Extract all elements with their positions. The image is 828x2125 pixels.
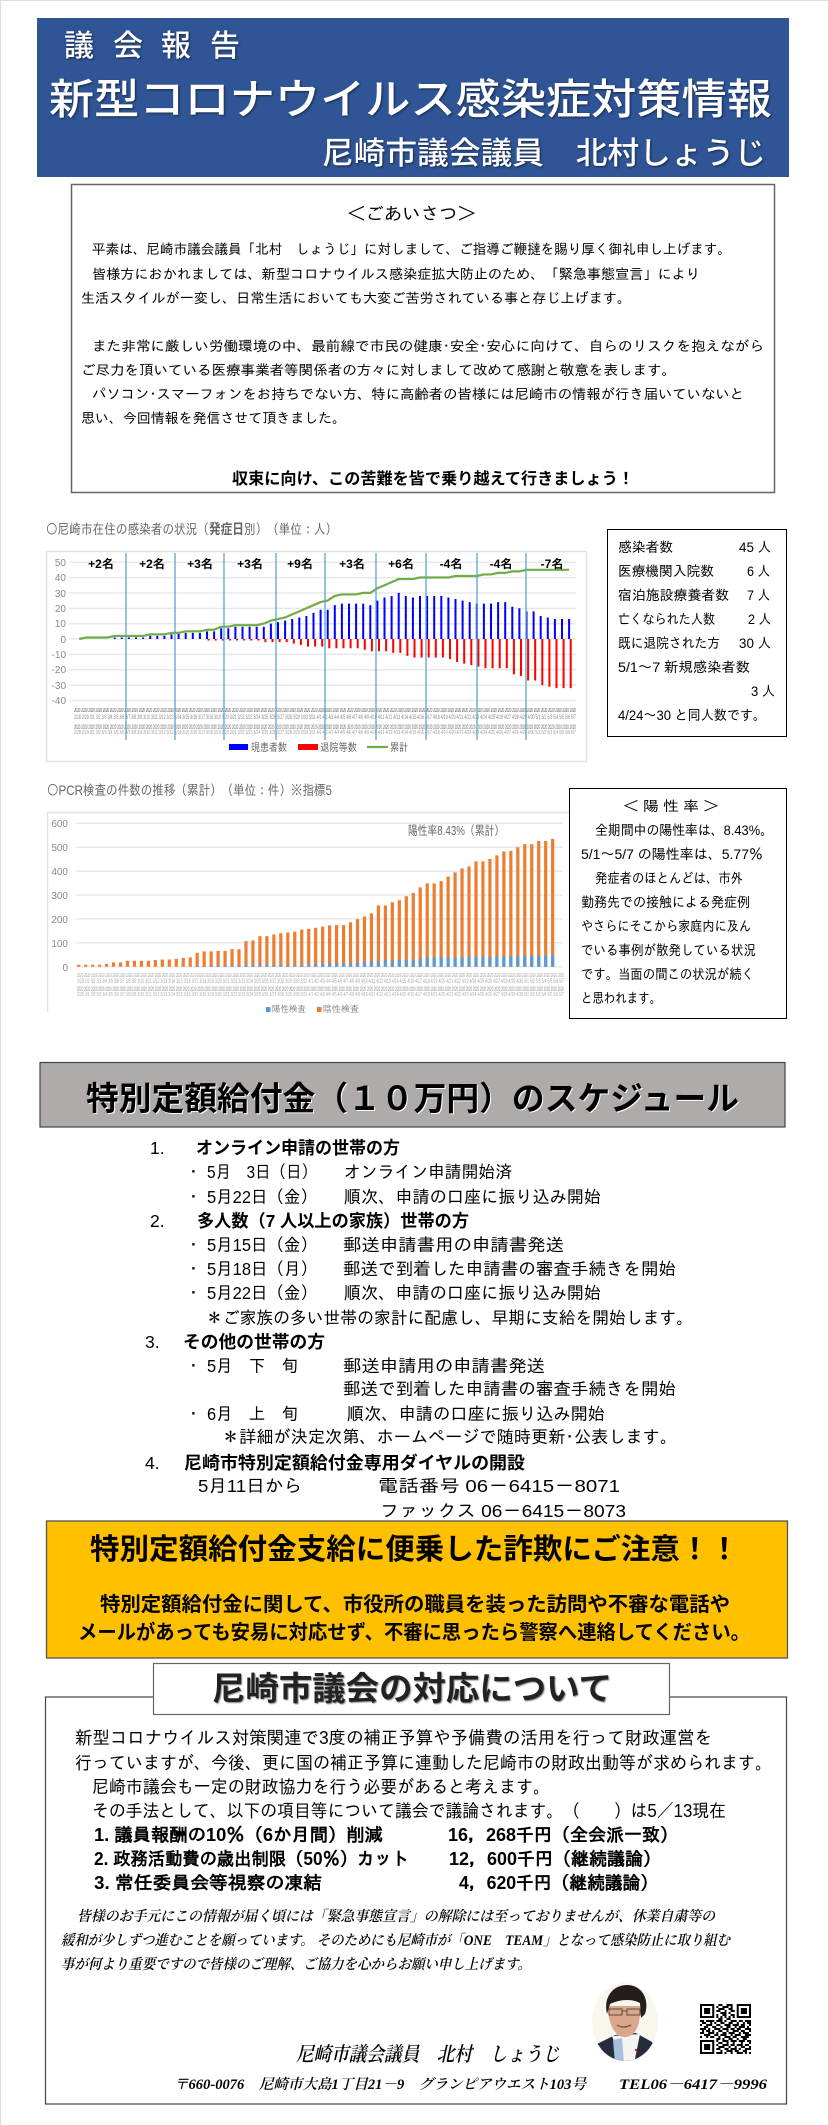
- budget items: 12，600千円（継続議論）: [449, 1849, 661, 1869]
- x axis date labels: 2/28 2/29 3/1 3/2 3/3 3/4 3/5 3/6 3/7 3/8 3/9 3/10 3/11 3/12 3/13 3/14 3/15 3/16 3/17 3/18 3/19 3/20 3/21 3/22 3/23 3/24 3/25 3/26 3/27 3/28 3/29 3/30 3/31 4/1 4/2 4/3 4/4 4/5 4/6 4/7 4/8 4/9 4/10 4/11 4/12 4/13 4/14 4/15 4/16 4/17 4/18 4/19 4/20 4/21 4/22 4/23 4/24 4/25 4/26 4/27 4/28 4/29 4/30 5/1 5/2 5/3 5/4 5/5 5/6 5/7: [74, 730, 576, 736]
- item 1: online applications: オンライン申請開始済: [344, 1162, 512, 1182]
- item 4: dedicated phone line: 尼崎市特別定額給付金専用ダイヤルの開設: [184, 1453, 526, 1473]
- x axis date labels: 2/29 3/1 3/2 3/3 3/4 3/5 3/6 3/7 3/8 3/9 3/10 3/11 3/12 3/13 3/14 3/15 3/16 3/17 3/18 3/19 3/20 3/21 3/22 3/23 3/24 3/25 3/26 3/27 3/28 3/29 3/30 3/31 4/1 4/2 4/3 4/4 4/5 4/6 4/7 4/8 4/9 4/10 4/11 4/12 4/13 4/14 4/15 4/16 4/17 4/18 4/19 4/20 4/21 4/22 4/23 4/24 4/25 4/26 4/27 4/28 4/29 4/30 5/1 5/2 5/3 5/4 5/5 5/6 5/7: [77, 992, 564, 998]
- green line: cumulative: [79, 570, 569, 639]
- y axis labels: -30: [52, 681, 66, 692]
- y axis labels: 10: [55, 619, 66, 630]
- item 2: large households: 郵送申請書用の申請書発送: [343, 1235, 565, 1255]
- item 4: dedicated phone line: 4.: [145, 1453, 160, 1473]
- y axis labels: 600: [51, 819, 68, 830]
- item 3: other households: 6月 上 旬: [207, 1404, 298, 1424]
- budget items: 3. 常任委員会等視察の凍結: [94, 1873, 322, 1893]
- weekly change labels: +6名: [388, 557, 414, 571]
- item 3: other households: ＊詳細が決定次第、ホームページで随時更新･公表します。: [222, 1427, 677, 1447]
- panel: infection summary: 既に退院された方: [618, 635, 720, 651]
- item 3: other households: [145, 1332, 677, 1447]
- item 2: large households: [150, 1211, 693, 1328]
- contact address: 〒660-0076 尼崎市大島1丁目21－9 グランピアウエスト103号: [174, 2076, 588, 2093]
- panel: infection summary: 6 人: [747, 563, 770, 579]
- budget items: 4，620千円（継続議論）: [459, 1873, 658, 1893]
- warning heading: 特別定額給付金支給に便乗した詐欺にご注意！！: [90, 1532, 739, 1566]
- blue bars: current patients: [115, 593, 569, 639]
- item 2: large households: 順次、申請の口座に振り込み開始: [344, 1283, 601, 1303]
- legend: 陽性検査: [272, 1004, 306, 1014]
- greeting body text: また非常に厳しい労働環境の中、最前線で市民の健康･安全･安心に向けて、自らのリスクを抱えながら: [92, 338, 764, 354]
- positivity body text: と思われます。: [581, 990, 661, 1006]
- greeting body text: [81, 241, 764, 426]
- x axis date labels: [74, 708, 576, 736]
- item 2: large households: ･: [189, 1283, 198, 1303]
- budget items: 2. 政務活動費の歳出制限（50％）カット: [94, 1849, 409, 1869]
- weekly change labels: +9名: [287, 557, 313, 571]
- legend: [266, 1004, 359, 1014]
- panel heading: 尼崎市議会の対応について: [212, 1670, 612, 1707]
- body text: その手法として、以下の項目等について議会で議論されます。（ ）は5／13現在: [92, 1801, 726, 1821]
- body text: 尼崎市議会も一定の財政協力を行う必要があると考えます。: [92, 1777, 550, 1797]
- author line: 尼崎市議会議員 北村しょうじ: [322, 128, 766, 173]
- panel: infection summary: 宿泊施設療養者数: [618, 587, 729, 603]
- item 1: online applications: ･: [189, 1187, 198, 1207]
- panel: infection summary: 5/1～7 新規感染者数: [618, 659, 750, 675]
- item 3: other households: 郵送申請用の申請書発送: [343, 1356, 546, 1376]
- panel: infection summary: 45 人: [739, 539, 771, 555]
- legend: 陰性検査: [323, 1004, 359, 1014]
- item 4: dedicated phone line: 電話番号 06－6415－8071: [378, 1476, 620, 1496]
- handwritten message: 皆様のお手元にこの情報が届く頃には「緊急事態宣言」の解除には至っておりませんが、休業自粛等の: [77, 1908, 716, 1925]
- item 2: large households: 5月18日（月）: [207, 1259, 317, 1279]
- greeting body text: パソコン･スマーフォンをお持ちでない方、特に高齢者の皆様には尼崎市の情報が行き届いていないと: [92, 386, 744, 402]
- chart: cumulative PCR tests: [48, 812, 569, 1014]
- schedule list: [145, 1138, 693, 1521]
- item 1: online applications: オンライン申請の世帯の方: [196, 1138, 400, 1158]
- blue bars: positive tests: [197, 955, 553, 967]
- positivity body text: 5/1～5/7 の陽性率は、5.77％: [581, 846, 763, 862]
- y axis labels: -40: [52, 696, 66, 707]
- x axis date labels: [77, 973, 564, 998]
- budget items: [94, 1825, 678, 1893]
- panel: infection summary: 感染者数: [618, 539, 673, 555]
- item 3: other households: ･: [189, 1356, 198, 1376]
- panel: infection summary: 30 人: [739, 635, 771, 651]
- positivity body text: 勤務先での接触による発症例: [581, 894, 750, 910]
- greeting body text: 思い、今回情報を発信させて頂きました。: [81, 410, 346, 426]
- signature: 尼崎市議会議員 北村 しょうじ: [296, 2043, 560, 2066]
- weekly change labels: +3名: [187, 557, 213, 571]
- red bars: discharged: [209, 639, 571, 688]
- weekly change labels: -4名: [440, 557, 462, 571]
- handwritten message: [61, 1908, 731, 1973]
- schedule heading banner: 特別定額給付金（１０万円）のスケジュール: [86, 1080, 739, 1117]
- panel heading: [154, 1664, 670, 1714]
- positivity body text: です。当面の間この状況が続く: [581, 966, 754, 982]
- y axis labels: 40: [55, 573, 66, 584]
- weekly change labels: +3名: [339, 557, 365, 571]
- item 3: other households: 郵送で到着した申請書の審査手続きを開始: [343, 1379, 676, 1399]
- panel: greeting: [72, 184, 774, 492]
- item 4: dedicated phone line: [145, 1453, 626, 1521]
- item 2: large households: 5月22日（金）: [207, 1283, 317, 1303]
- chart: infected persons by onset date: [46, 552, 586, 762]
- chart title: PCR tests: ○PCR検査の件数の推移（累計）（単位：件）※指標5: [47, 782, 332, 798]
- handwritten message: 事が何より重要ですので皆様のご理解、ご協力を心からお願い申し上げます。: [61, 1956, 531, 1973]
- y axis labels: [52, 558, 66, 707]
- warning text: 特別定額給付金に関して、市役所の職員を装った訪問や不審な電話や: [100, 1593, 730, 1616]
- item 4: dedicated phone line: 5月11日から: [198, 1476, 302, 1496]
- panel: infection summary: 4/24～30 と同人数です。: [618, 707, 766, 723]
- panel: infection summary: 2 人: [748, 611, 771, 627]
- header banner: [37, 18, 789, 177]
- legend: 現患者数: [251, 742, 287, 754]
- panel: fraud warning: [46, 1521, 788, 1658]
- item 3: other households: 3.: [145, 1332, 160, 1352]
- legend: [229, 741, 408, 754]
- item 2: large households: 2.: [150, 1211, 165, 1231]
- panel: city council response: [46, 1664, 786, 2104]
- body text: 行っていますが、今後、更に国の補正予算に連動した尼崎市の財政出動等が求められます。: [75, 1753, 772, 1773]
- legend: 退院等数: [320, 741, 357, 754]
- budget items: 1. 議員報酬の10％（6か月間）削減: [94, 1825, 383, 1845]
- item 2: large households: 郵送で到着した申請書の審査手続きを開始: [343, 1259, 676, 1279]
- body text: 新型コロナウイルス対策関連で3度の補正予算や予備費の活用を行って財政運営を: [75, 1728, 712, 1748]
- y axis labels: 300: [51, 891, 68, 902]
- kicker: council report: 議会報告: [64, 21, 240, 65]
- orange bars: negative tests: [79, 839, 553, 967]
- y axis labels: 400: [51, 867, 68, 878]
- icon: portrait photo: [592, 1983, 658, 2061]
- item 3: other households: 順次、申請の口座に振り込み開始: [347, 1404, 605, 1424]
- y axis labels: 30: [55, 589, 66, 600]
- item 3: other households: その他の世帯の方: [183, 1332, 325, 1352]
- item 2: large households: ･: [189, 1259, 198, 1279]
- weekly change labels: -4名: [490, 557, 512, 571]
- chart title: infections by onset date: ○尼崎市在住の感染者の状況（発症日別）（単位：人）: [46, 521, 337, 537]
- item 1: online applications: 順次、申請の口座に振り込み開始: [344, 1187, 601, 1207]
- y axis labels: 0: [62, 963, 68, 974]
- panel: infection summary: [608, 530, 786, 736]
- budget items: 16，268千円（全会派一致）: [448, 1825, 678, 1845]
- greeting body text: 生活スタイルが一変し、日常生活においても大変ご苦労されている事と存じ上げます。: [81, 290, 631, 306]
- y axis labels: -10: [52, 650, 66, 661]
- item 1: online applications: [150, 1138, 601, 1207]
- item 1: online applications: 1.: [150, 1138, 165, 1158]
- y axis labels: 20: [55, 604, 66, 615]
- positivity body text: 全期間中の陽性率は、8.43%。: [595, 822, 773, 838]
- item 2: large households: 5月15日（金）: [207, 1235, 317, 1255]
- weekly change labels: -7名: [541, 557, 563, 571]
- item 1: online applications: 5月22日（金）: [207, 1187, 317, 1207]
- weekly period dividers: [126, 553, 526, 740]
- schedule heading banner: [40, 1062, 785, 1127]
- main title: 新型コロナウイルス感染症対策情報: [49, 66, 772, 127]
- positivity body text: [581, 822, 773, 1006]
- item 3: other households: ･: [189, 1404, 198, 1424]
- item 2: large households: 多人数（7 人以上の家族）世帯の方: [197, 1211, 469, 1231]
- positivity body text: でいる事例が散発している状況: [581, 942, 756, 958]
- positivity heading: ＜ 陽 性 率 ＞: [623, 798, 719, 814]
- weekly change labels: [88, 557, 563, 571]
- icon: QR code: [700, 2005, 751, 2053]
- weekly change labels: +3名: [237, 557, 263, 571]
- y axis labels: 50: [55, 558, 66, 569]
- y axis labels: -20: [52, 665, 66, 676]
- panel: infection summary: 7 人: [747, 587, 770, 603]
- body text: [75, 1728, 772, 1821]
- panel: fraud warning: メールがあっても安易に対応せず、不審に思ったら警察へ連絡してください。: [78, 1620, 750, 1644]
- item 2: large households: ＊ご家族の多い世帯の家計に配慮し、早期に支給を開始します。: [206, 1308, 693, 1328]
- item 1: online applications: ･: [189, 1162, 198, 1182]
- y axis labels: [51, 819, 68, 974]
- panel: infection summary: 医療機関入院数: [618, 563, 714, 579]
- handwritten message: 緩和が少しずつ進むことを願っています。 そのためにも尼崎市が「ONE TEAM」となって感染防止に取り組む: [61, 1932, 731, 1949]
- greeting heading: ＜ごあいさつ＞: [347, 204, 476, 224]
- greeting body text: 皆様方におかれましては、新型コロナウイルス感染症拡大防止のため、「緊急事態宣言」により: [92, 266, 700, 282]
- contact phone: TEL06－6417－9996: [619, 2077, 768, 2093]
- item 2: large households: ･: [189, 1235, 198, 1255]
- y axis labels: 500: [51, 843, 68, 854]
- closing message: 収束に向け、この苦難を皆で乗り越えて行きましょう！: [232, 469, 634, 488]
- y axis labels: 100: [51, 939, 68, 950]
- weekly change labels: +2名: [88, 557, 114, 571]
- y axis labels: 0: [60, 635, 66, 646]
- panel: positivity rate: [570, 788, 786, 1018]
- item 1: online applications: 5月 3日（日）: [207, 1162, 317, 1182]
- positivity body text: やさらにそこから家庭内に及ん: [581, 918, 751, 934]
- weekly change labels: +2名: [139, 557, 165, 571]
- y axis labels: 200: [51, 915, 68, 926]
- positivity body text: 発症者のほとんどは、市外: [595, 870, 743, 886]
- legend: 累計: [390, 742, 408, 754]
- greeting body text: ご尽力を頂いている医療事業者等関係者の方々に対しまして改めて感謝と敬意を表します。: [81, 362, 676, 378]
- greeting body text: 平素は、尼崎市議会議員「北村 しょうじ」に対しまして、ご指導ご鞭撻を賜り厚く御礼申し上げます。: [92, 241, 731, 257]
- item 3: other households: 5月 下 旬: [207, 1356, 298, 1376]
- panel: infection summary: 3 人: [751, 683, 775, 699]
- item 4: dedicated phone line: ファックス 06－6415－8073: [380, 1501, 626, 1521]
- panel: infection summary: 亡くなられた人数: [618, 611, 715, 627]
- annotation: positivity rate: 陽性率8.43%（累計）: [408, 823, 504, 838]
